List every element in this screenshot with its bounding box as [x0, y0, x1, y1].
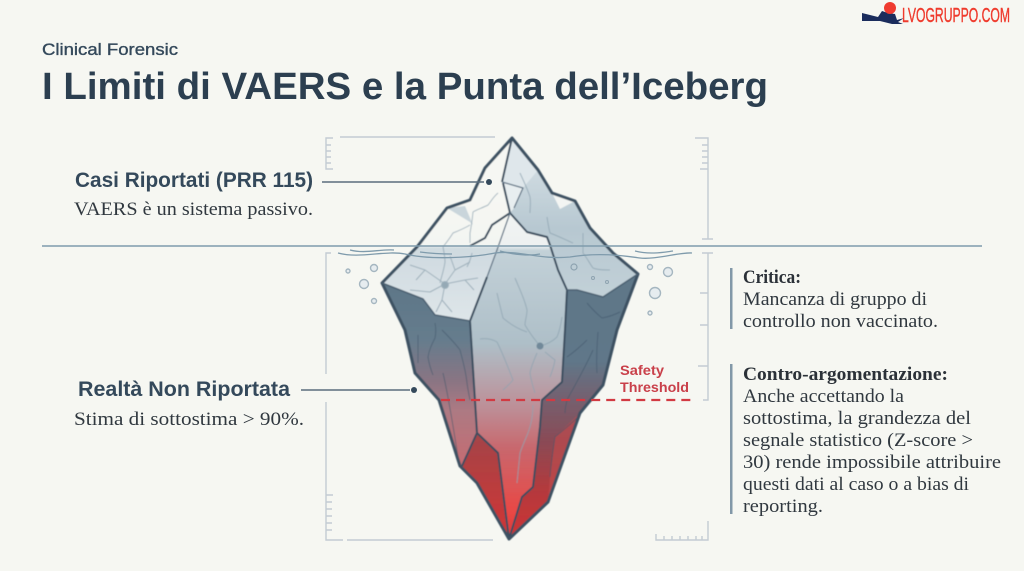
iceberg: upper-right face — [502, 138, 638, 297]
callout: Realtà Non Riportata — [74, 378, 417, 430]
threshold label: Threshold — [620, 379, 689, 395]
iceberg: dark red lower-left facet — [462, 433, 509, 539]
neuron: left — [410, 256, 478, 312]
block text: sottostima, la grandezza del — [743, 409, 971, 429]
title: I Limiti di VAERS e la Punta dell’Iceberg — [42, 66, 768, 108]
iceberg: central face — [470, 213, 567, 539]
bubbles — [346, 264, 672, 315]
text block: Contro-argomentazione — [730, 364, 1001, 517]
block text: controllo non vaccinato. — [743, 312, 938, 332]
leader line — [322, 179, 492, 185]
block text: Mancanza di gruppo di — [743, 290, 927, 310]
block text: Critica: — [743, 268, 801, 288]
iceberg: right dark face — [509, 274, 638, 539]
safety threshold — [441, 362, 696, 400]
waves — [338, 250, 692, 258]
iceberg: upper-left and left underwater light face — [382, 138, 512, 321]
callout heading: Casi Riportati (PRR 115) — [75, 169, 313, 192]
accent bar — [730, 268, 732, 329]
block text: questi dati al caso o a bias di — [743, 475, 969, 495]
block text: segnale statistico (Z-score > — [743, 431, 973, 451]
block text: Contro-argomentazione: — [743, 365, 948, 385]
leader line — [301, 387, 417, 393]
block text: Anche accettando la — [743, 387, 904, 407]
threshold label: Safety — [620, 362, 664, 378]
iceberg: left dark face — [382, 283, 509, 539]
block text: 30) rende impossibile attribuire — [743, 453, 1001, 473]
callout heading: Realtà Non Riportata — [78, 378, 290, 401]
water line — [42, 245, 982, 247]
icon: hand and red ball — [862, 2, 904, 24]
text block: Critica — [730, 268, 938, 332]
callout body: VAERS è un sistema passivo. — [74, 200, 313, 220]
block text — [743, 268, 938, 332]
logo: LVOGRUPPO.COM — [862, 2, 1010, 27]
cracks — [418, 138, 620, 539]
callout: Casi Riportati — [74, 169, 492, 220]
block text — [743, 365, 1001, 517]
kicker: Clinical Forensic: Clinical Forensic — [42, 41, 178, 59]
threshold dashed line — [441, 399, 696, 401]
iceberg illustration — [382, 138, 638, 539]
callout body: Stima di sottostima > 90%. — [74, 410, 304, 430]
accent bar — [730, 364, 732, 514]
neuron: central — [536, 342, 544, 350]
measurement rulers — [326, 137, 713, 540]
iceberg outline — [382, 138, 638, 539]
block text: reporting. — [743, 497, 823, 517]
iceberg: top edge of lower faces — [382, 274, 638, 321]
